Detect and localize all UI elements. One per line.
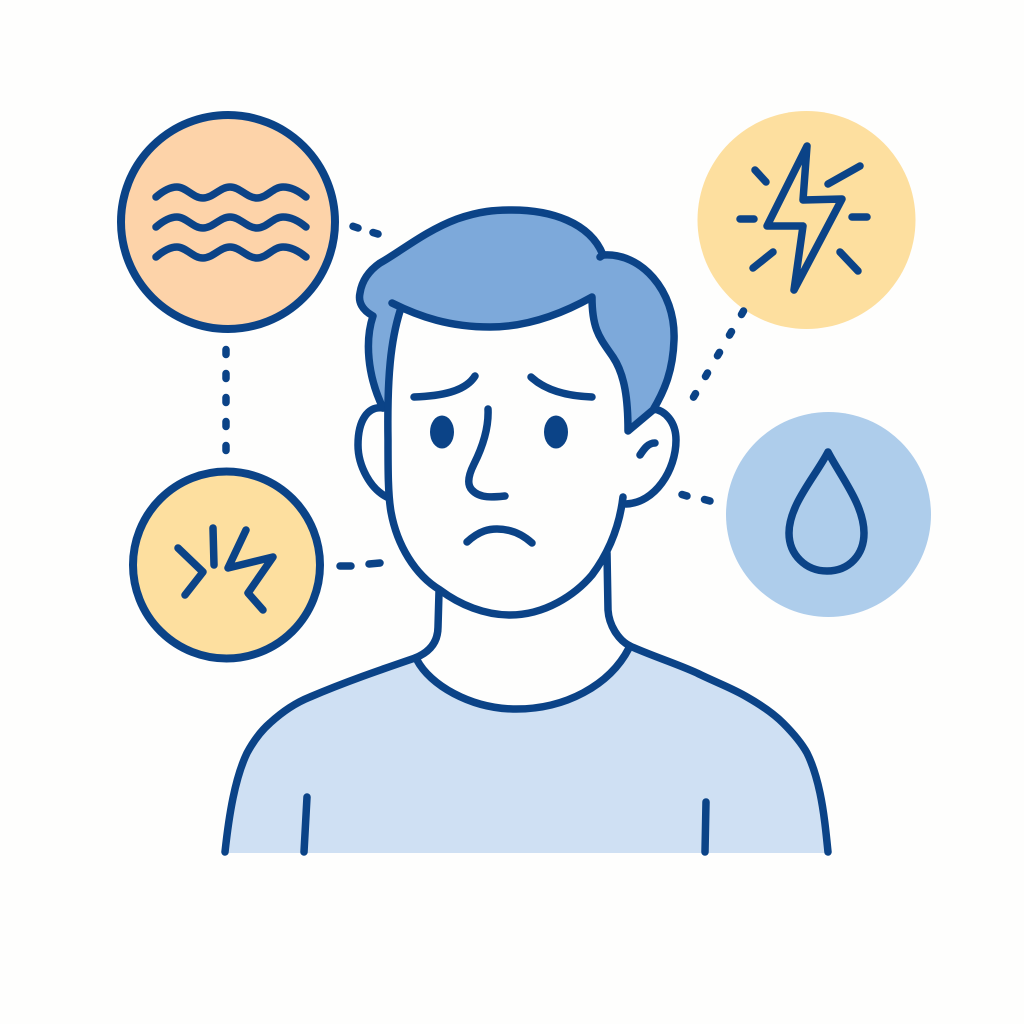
neck bbox=[415, 553, 630, 658]
sad mouth bbox=[467, 529, 532, 543]
eyebrows bbox=[414, 376, 592, 397]
panel: lightning bolt circle bbox=[698, 111, 916, 329]
left ear bbox=[358, 408, 389, 498]
connector: wave circle to head bbox=[353, 226, 378, 234]
connector: drop circle to ear bbox=[682, 494, 710, 501]
nose bbox=[469, 409, 505, 497]
connector: pain circle to head bbox=[340, 563, 380, 566]
hair bbox=[360, 210, 674, 431]
panel: pain burst circle bbox=[133, 472, 320, 658]
connector: bolt circle to head bbox=[693, 311, 744, 398]
face bbox=[388, 311, 623, 615]
right ear bbox=[626, 409, 676, 504]
panel: water drop circle bbox=[726, 412, 931, 617]
eyes bbox=[430, 416, 568, 448]
torso: light blue shirt bbox=[224, 646, 828, 853]
connector: wave circle to pain circle bbox=[222, 350, 230, 451]
panel: wavy lines circle bbox=[121, 115, 335, 329]
